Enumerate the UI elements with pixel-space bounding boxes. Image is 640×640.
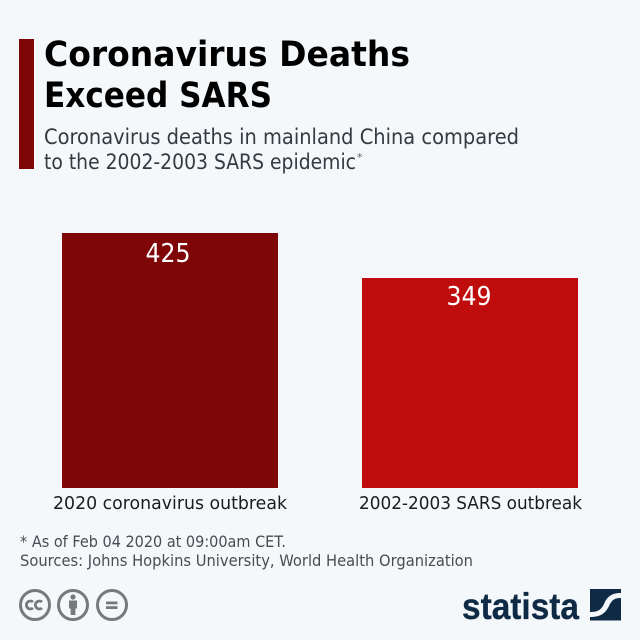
title: Coronavirus Deaths xyxy=(44,35,410,75)
bar chart xyxy=(53,233,583,514)
subtitle: * xyxy=(357,151,363,164)
title xyxy=(44,35,410,116)
title: Exceed SARS xyxy=(44,76,272,116)
subtitle xyxy=(44,125,519,174)
footnote and sources xyxy=(20,532,473,570)
icon: attribution xyxy=(58,590,88,620)
footnote and sources: * As of Feb 04 2020 at 09:00am CET. xyxy=(20,532,286,551)
subtitle: Coronavirus deaths in mainland China compared xyxy=(44,125,519,149)
bar: 2002-2003 SARS outbreak xyxy=(359,278,583,514)
bar: 2002-2003 SARS outbreak: 349 xyxy=(446,282,492,312)
icon: creative commons xyxy=(20,590,50,620)
subtitle: to the 2002-2003 SARS epidemic xyxy=(44,150,356,174)
footnote and sources: Sources: Johns Hopkins University, World Health Organization xyxy=(20,551,473,570)
bar: 2020 coronavirus outbreak: 2020 coronavirus outbreak xyxy=(53,493,288,514)
bar: 2020 coronavirus outbreak xyxy=(53,233,288,514)
title accent bar xyxy=(19,39,34,169)
bar: 2002-2003 SARS outbreak: 2002-2003 SARS outbreak xyxy=(359,493,583,514)
bar: 2020 coronavirus outbreak: 425 xyxy=(146,239,190,269)
statista wordmark: statista xyxy=(462,586,579,627)
icon: statista logo xyxy=(590,589,621,620)
icon: no derivatives xyxy=(98,590,126,620)
